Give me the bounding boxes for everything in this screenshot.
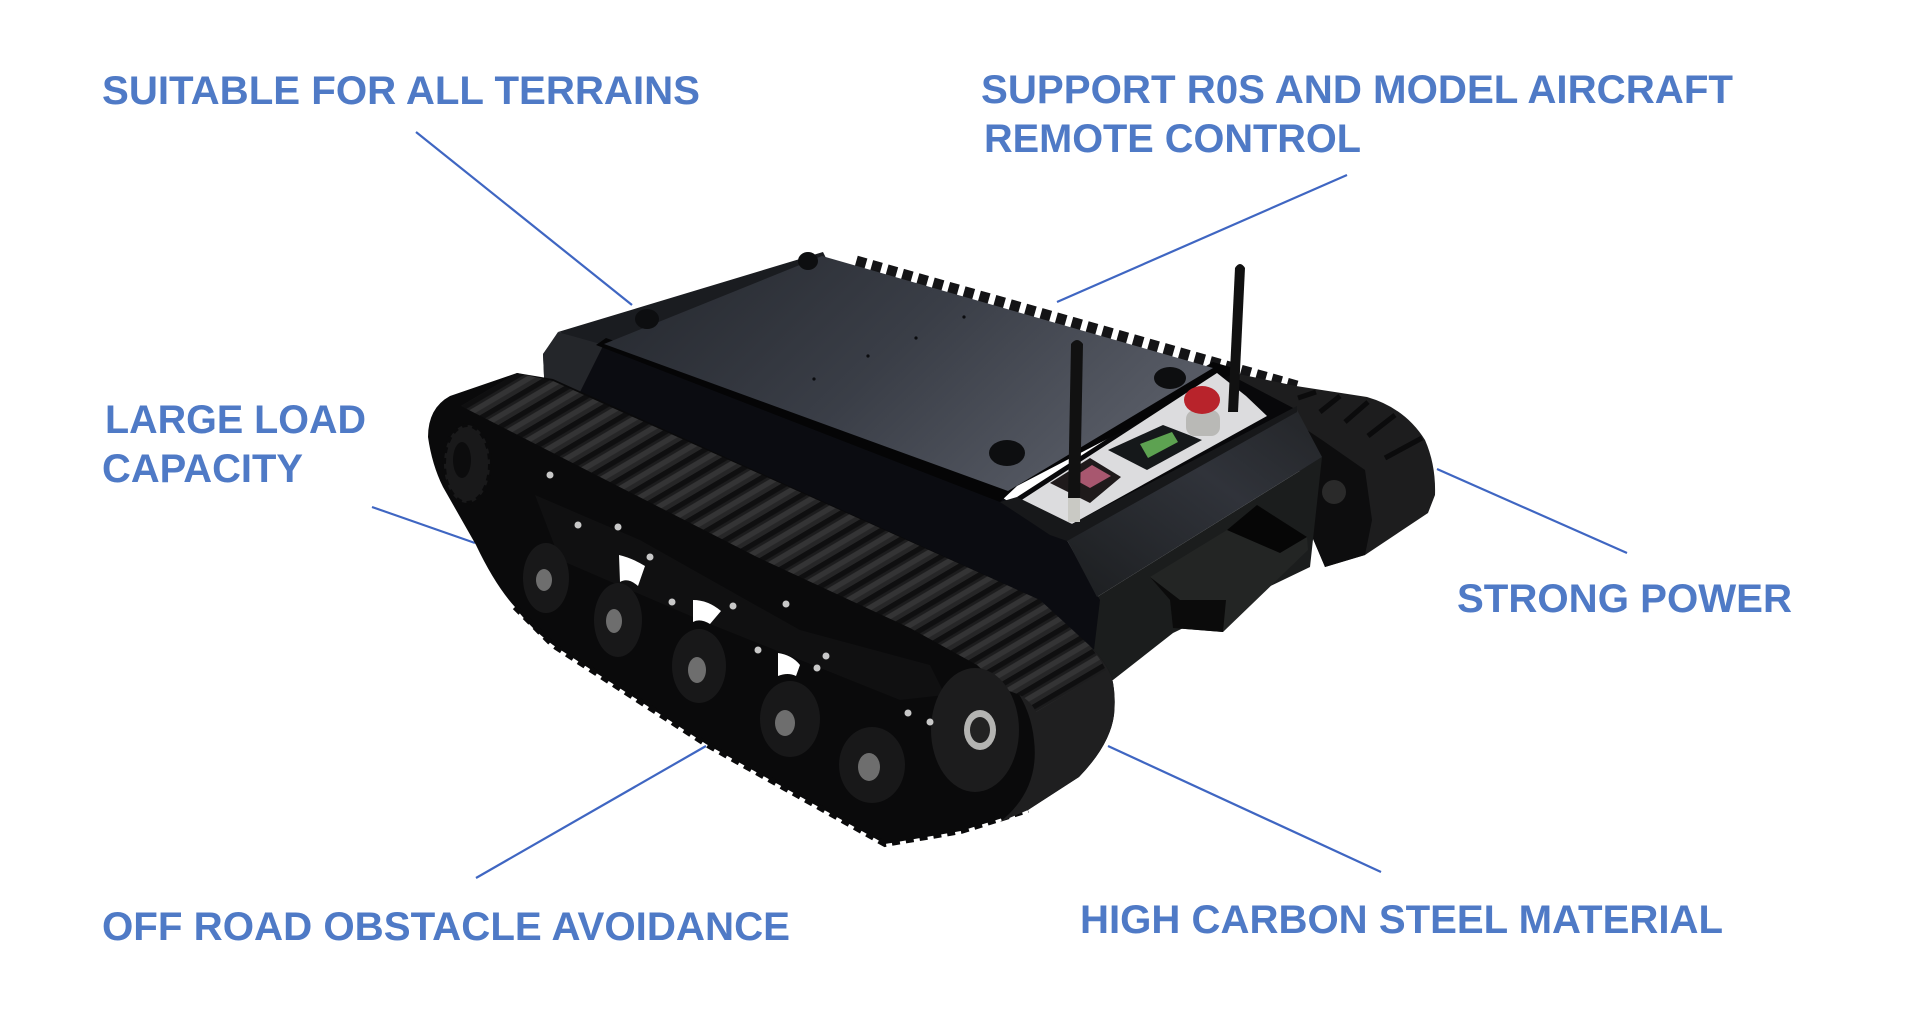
plate holes xyxy=(812,315,966,381)
heading: support ROS and remote control xyxy=(981,68,1733,161)
heading: strong power: STRONG POWER xyxy=(1457,577,1792,621)
right antenna xyxy=(1228,264,1245,412)
front idler wheel xyxy=(931,668,1019,792)
chassis top rim xyxy=(558,252,826,345)
chassis lower side xyxy=(1060,457,1322,682)
wheel hubs xyxy=(536,569,880,781)
rear track shading xyxy=(1305,430,1372,567)
rear track end xyxy=(1200,366,1435,567)
rear track ribs xyxy=(856,262,1300,388)
emergency stop button xyxy=(1184,386,1220,436)
suspension plate xyxy=(535,495,945,700)
plate recess frame xyxy=(596,338,1240,502)
track tread band xyxy=(461,373,1106,712)
mounting bolts xyxy=(546,472,934,726)
chassis chamfer xyxy=(543,332,604,402)
road wheels xyxy=(523,543,905,803)
sprocket xyxy=(444,425,490,503)
chassis left side xyxy=(543,320,1100,650)
heading: high carbon steel material: HIGH CARBON STEEL MATERIAL xyxy=(1080,898,1723,942)
left track body xyxy=(428,373,1115,844)
power switch xyxy=(1050,458,1121,503)
handle xyxy=(1150,505,1308,632)
heading: large load capacity xyxy=(102,398,366,491)
knobs xyxy=(635,252,1186,466)
front panel rim xyxy=(1000,406,1297,541)
battery meter xyxy=(1108,425,1202,470)
white gaps xyxy=(619,555,800,676)
top plate xyxy=(604,256,1213,491)
rear track tread lines xyxy=(1298,392,1422,458)
heading: off road obstacle avoidance: OFF ROAD OBSTACLE AVOIDANCE xyxy=(102,905,790,949)
heading: suitable for all terrains: SUITABLE FOR ALL TERRAINS xyxy=(102,69,700,113)
chassis front panel xyxy=(1067,410,1322,597)
track bottom teeth xyxy=(515,607,1028,844)
steel control panel xyxy=(1017,373,1267,524)
heading: support ROS and remote control: REMOTE CONTROL xyxy=(984,117,1361,161)
left antenna xyxy=(1068,340,1083,522)
leader lines xyxy=(372,132,1627,878)
heading: large load capacity: CAPACITY xyxy=(102,447,303,491)
track front curve xyxy=(1000,645,1115,822)
heading: support ROS and remote control: SUPPORT R0S AND MODEL AIRCRAFT xyxy=(981,68,1733,112)
robot tracked chassis xyxy=(428,252,1435,844)
heading: large load capacity: LARGE LOAD xyxy=(105,398,366,442)
chassis underlay xyxy=(1017,368,1297,540)
rear wheel hub xyxy=(1322,480,1346,504)
